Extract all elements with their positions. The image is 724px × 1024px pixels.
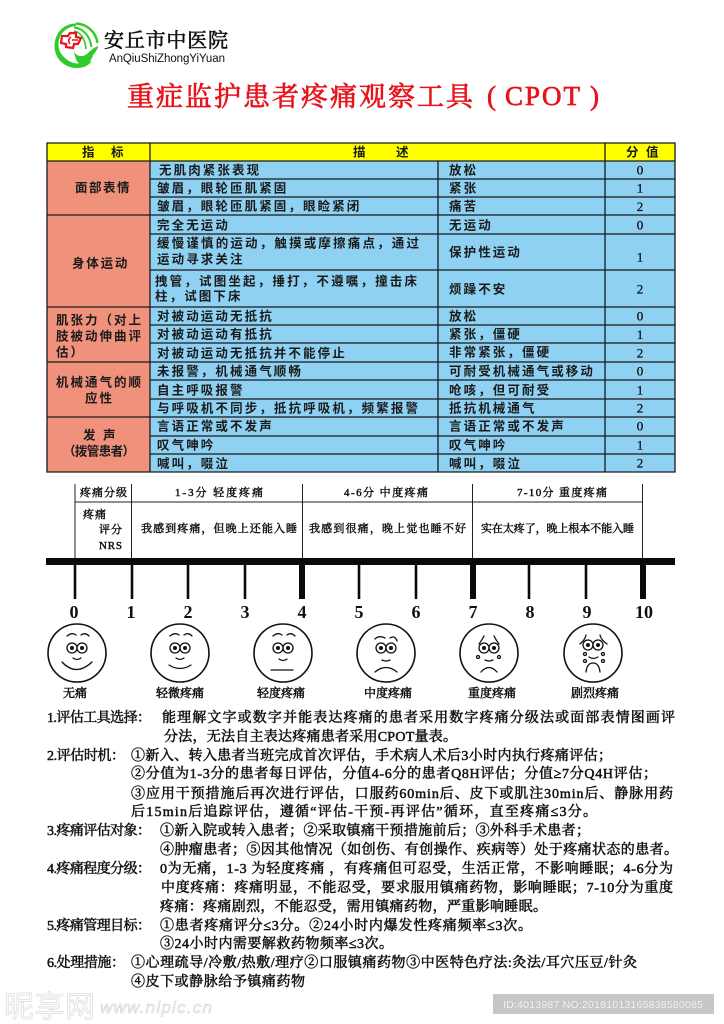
row group: muscle tension: 放松 bbox=[449, 308, 478, 324]
row group: ventilator compliance: 应性 bbox=[85, 390, 114, 406]
note 5: pain management goals: ①患者疼痛评分≤3分。②24小时内爆发性疼痛频率≤3次。 bbox=[160, 917, 532, 934]
row group: facial expression: 皱眉，眼轮匝肌紧固，眼睑紧闭 bbox=[157, 198, 361, 214]
note 2: assessment timing: ①新入、转入患者当班完成首次评估，手术病人术后3小时内执行疼痛评估； bbox=[131, 747, 612, 764]
row group: body movement: 缓慢谨慎的运动，触摸或摩擦痛点，通过 bbox=[157, 236, 419, 250]
note 5: pain management goals: 5.疼痛管理目标： bbox=[47, 917, 151, 934]
row group: facial expression: 无肌肉紧张表现 bbox=[159, 162, 261, 178]
title: 重症监护患者疼痛观察工具 bbox=[127, 82, 475, 112]
pain grade table bbox=[75, 484, 643, 558]
note 2: assessment timing: 后15min后追踪评估，遵循“评估-干预-再评估”循环，直至疼痛≤3分。 bbox=[131, 804, 597, 820]
pain grade table: 疼痛分级 bbox=[80, 485, 127, 499]
row group: vocalization: 叹气呻吟 bbox=[157, 438, 215, 452]
note 4: pain grading: 4.疼痛程度分级： bbox=[47, 860, 151, 877]
row group: facial expression bbox=[47, 161, 675, 215]
row group: ventilator compliance: 机械通气的顺 bbox=[56, 374, 143, 390]
note 6: treatment measures bbox=[47, 954, 637, 990]
row group: muscle tension: 0 bbox=[637, 308, 643, 324]
note 5: pain management goals: ③24小时内需要解救药物频率≤3次。 bbox=[160, 935, 393, 952]
table header: 指 bbox=[82, 144, 95, 160]
row group: body movement bbox=[47, 215, 675, 307]
row group: body movement: 运动寻求关注 bbox=[157, 252, 245, 266]
face: no pain bbox=[48, 624, 106, 700]
row group: ventilator compliance: 与呼吸机不同步，抵抗呼吸机，频繁报警 bbox=[157, 400, 418, 416]
number scale axis: 7 bbox=[468, 602, 478, 622]
row group: ventilator compliance: 0 bbox=[637, 364, 643, 378]
row group: body movement: 2 bbox=[637, 282, 643, 296]
hospital name: 安丘市中医院 bbox=[104, 29, 228, 52]
watermark: site name: www.nipic.cn bbox=[100, 998, 212, 1017]
number scale axis: 10 bbox=[635, 602, 653, 622]
number scale axis: 3 bbox=[240, 602, 250, 622]
note 6: treatment measures: ①心理疏导/冷敷/热敷/理疗②口服镇痛药物③中医特色疗法:灸法/耳穴压豆/针灸 bbox=[131, 954, 637, 971]
note 3: assessment subjects bbox=[47, 822, 678, 858]
row group: ventilator compliance: 2 bbox=[637, 400, 643, 416]
row group: vocalization: 喊叫，啜泣 bbox=[449, 456, 522, 471]
hospital name latin: AnQiuShiZhongYiYuan bbox=[109, 53, 225, 65]
note 4: pain grading: 0为无痛，1-3 为轻度疼痛 ，有疼痛但可忍受，生活正常，不影响睡眠；4-6分为 bbox=[160, 860, 673, 877]
row group: muscle tension: 2 bbox=[637, 346, 643, 360]
table header: 值 bbox=[646, 144, 659, 160]
note 4: pain grading bbox=[47, 860, 673, 915]
row group: ventilator compliance: 未报警，机械通气顺畅 bbox=[157, 364, 303, 378]
row group: facial expression: 皱眉，眼轮匝肌紧固 bbox=[157, 180, 288, 196]
note 3: assessment subjects: ①新入院或转入患者；②采取镇痛干预措施前后；③外科手术患者； bbox=[160, 822, 590, 839]
row group: ventilator compliance: 1 bbox=[637, 382, 643, 398]
note 2: assessment timing: ③应用干预措施后再次进行评估，口服药60min后、皮下或肌注30min后、静脉用药 bbox=[131, 785, 673, 802]
row group: ventilator compliance: 自主呼吸报警 bbox=[157, 382, 245, 398]
table header: 描 bbox=[353, 144, 366, 160]
number scale axis: 4 bbox=[298, 602, 306, 622]
face: slight pain: 轻微疼痛 bbox=[156, 685, 204, 700]
note 3: assessment subjects: 3.疼痛评估对象： bbox=[47, 823, 151, 839]
table header: 述 bbox=[396, 144, 409, 160]
pain grade table: 疼痛 bbox=[83, 508, 106, 521]
row group: body movement: 身体运动 bbox=[72, 256, 129, 270]
row group: muscle tension: 肢被动伸曲评 bbox=[56, 328, 143, 344]
row group: vocalization: 声 bbox=[103, 428, 116, 442]
row group: body movement: 烦躁不安 bbox=[449, 282, 507, 296]
pain grade table: 评分 bbox=[99, 522, 122, 536]
row group: vocalization: 言语正常或不发声 bbox=[157, 418, 274, 434]
row group: muscle tension: 紧张，僵硬 bbox=[449, 326, 522, 342]
row group: muscle tension: 对被动运动无抵抗 bbox=[157, 308, 274, 324]
row group: muscle tension bbox=[47, 307, 675, 362]
row group: body movement: 无运动 bbox=[449, 218, 493, 232]
row group: body movement: 柱，试图下床 bbox=[155, 288, 243, 304]
watermark: site name bbox=[4, 991, 212, 1024]
title: ) bbox=[590, 81, 599, 111]
face: severe pain: 重度疼痛 bbox=[468, 685, 516, 700]
face: moderate pain: 中度疼痛 bbox=[364, 685, 412, 700]
row group: vocalization: 喊叫，啜泣 bbox=[157, 456, 230, 471]
table header: 分 bbox=[626, 146, 639, 160]
note 4: pain grading: 疼痛：疼痛剧烈，不能忍受，需用镇痛药物，严重影响睡眠。 bbox=[160, 898, 547, 915]
row group: body movement: 完全无运动 bbox=[157, 218, 230, 232]
pain grade table: 4-6分 中度疼痛 bbox=[344, 485, 428, 499]
panel: pain scale bbox=[46, 484, 675, 700]
row group: body movement: 1 bbox=[637, 250, 643, 264]
note 5: pain management goals bbox=[47, 917, 532, 952]
row group: ventilator compliance: 可耐受机械通气或移动 bbox=[449, 364, 595, 378]
note 4: pain grading: 中度疼痛：疼痛明显，不能忍受，要求服用镇痛药物，影响睡眠；7-10分为重度 bbox=[161, 879, 673, 896]
note 1: assessment tool selection: 1.评估工具选择： bbox=[47, 709, 151, 726]
pain grade table: NRS bbox=[99, 540, 122, 552]
note 6: treatment measures: 6.处理措施： bbox=[47, 954, 125, 971]
face: mild pain bbox=[254, 624, 312, 700]
face: extreme pain: 剧烈疼痛 bbox=[571, 685, 619, 700]
number scale axis: 8 bbox=[526, 602, 534, 622]
row group: body movement: 0 bbox=[637, 218, 643, 232]
pain grade table: 我感到疼痛，但晚上还能入睡 bbox=[141, 521, 297, 535]
row group: facial expression: 面部表情 bbox=[75, 180, 131, 195]
row group: vocalization: 0 bbox=[637, 418, 643, 434]
row group: vocalization bbox=[47, 417, 675, 472]
row group: vocalization: 2 bbox=[637, 456, 643, 470]
number scale axis: 1 bbox=[126, 602, 136, 622]
note 2: assessment timing: 2.评估时机： bbox=[47, 747, 125, 764]
row group: facial expression: 紧张 bbox=[449, 180, 478, 196]
face: severe pain bbox=[460, 624, 518, 700]
pain grade table: 实在太疼了，晚上根本不能入睡 bbox=[481, 521, 634, 535]
face: extreme pain bbox=[564, 624, 622, 700]
row group: facial expression: 1 bbox=[637, 180, 643, 196]
pain grade table: 我感到很痛，晚上觉也睡不好 bbox=[309, 521, 466, 535]
row group: vocalization: 1 bbox=[637, 438, 643, 452]
row group: ventilator compliance bbox=[47, 362, 675, 417]
note 1: assessment tool selection bbox=[47, 709, 675, 745]
number scale axis: 6 bbox=[412, 602, 420, 622]
text block: assessment notes bbox=[47, 709, 678, 990]
note 6: treatment measures: ④皮下或静脉给予镇痛药物 bbox=[131, 973, 305, 990]
pain grade table: 1-3分 轻度疼痛 bbox=[175, 485, 263, 499]
title: CPOT bbox=[505, 81, 580, 111]
row group: muscle tension: 对被动运动有抵抗 bbox=[157, 326, 274, 342]
row group: muscle tension: 对被动运动无抵抗并不能停止 bbox=[157, 346, 347, 360]
number scale axis: 9 bbox=[582, 602, 592, 622]
number scale axis: 5 bbox=[354, 602, 364, 622]
table header bbox=[47, 143, 675, 161]
row group: ventilator compliance: 呛咳，但可耐受 bbox=[449, 382, 551, 398]
row group: muscle tension: 非常紧张，僵硬 bbox=[449, 344, 551, 360]
watermark: image id: ID:4013987 NO:20181013165838580085 bbox=[503, 999, 703, 1011]
face: mild pain: 轻度疼痛 bbox=[257, 685, 305, 700]
row group: muscle tension: 估） bbox=[56, 344, 85, 360]
row group: muscle tension: 1 bbox=[637, 327, 643, 342]
title: ( bbox=[487, 81, 496, 111]
pain grade table: 7-10分 重度疼痛 bbox=[517, 485, 607, 499]
table grid lines bbox=[47, 143, 675, 472]
row group: vocalization: 言语正常或不发声 bbox=[449, 418, 566, 434]
row group: ventilator compliance: 抵抗机械通气 bbox=[449, 400, 537, 416]
note 1: assessment tool selection: 能理解文字或数字并能表达疼痛的患者采用数字疼痛分级法或面部表情图画评 bbox=[162, 709, 675, 726]
face: no pain: 无痛 bbox=[63, 685, 87, 700]
hospital logo bbox=[54, 24, 228, 68]
watermark: image id bbox=[493, 994, 714, 1014]
note 3: assessment subjects: ④肿瘤患者；⑤因其他情况（如创伤、有创操作、疾病等）处于疼痛状态的患者。 bbox=[160, 841, 678, 858]
panel: CPOT table bbox=[47, 143, 675, 472]
number scale axis: 0 bbox=[70, 602, 78, 622]
row group: vocalization: （拨管患者） bbox=[63, 444, 135, 458]
note 2: assessment timing: ②分值为1-3分的患者每日评估，分值4-6分的患者Q8H评估；分值≥7分Q4H评估； bbox=[131, 765, 657, 782]
row group: facial expression: 放松 bbox=[449, 162, 478, 178]
note 1: assessment tool selection: 分法，无法自主表达疼痛患者采用CPOT量表。 bbox=[164, 728, 457, 745]
note 2: assessment timing bbox=[47, 747, 673, 820]
row group: muscle tension: 肌张力（对上 bbox=[56, 312, 143, 328]
number scale axis bbox=[46, 558, 675, 622]
icon: green crescent emblem bbox=[54, 24, 98, 68]
table header: 标 bbox=[111, 144, 124, 160]
row group: body movement: 保护性运动 bbox=[449, 244, 522, 260]
face: moderate pain bbox=[357, 624, 415, 700]
watermark: site name: 昵享网 bbox=[4, 991, 95, 1024]
face: slight pain bbox=[151, 624, 209, 700]
row group: vocalization: 叹气呻吟 bbox=[449, 438, 507, 452]
row group: facial expression: 痛苦 bbox=[449, 198, 478, 214]
row group: body movement: 拽管，试图坐起，捶打，不遵嘱，撞击床 bbox=[155, 274, 417, 288]
number scale axis: 2 bbox=[184, 602, 192, 622]
row group: facial expression: 2 bbox=[637, 199, 643, 214]
row group: facial expression: 0 bbox=[637, 162, 643, 178]
row group: vocalization: 发 bbox=[83, 428, 96, 442]
